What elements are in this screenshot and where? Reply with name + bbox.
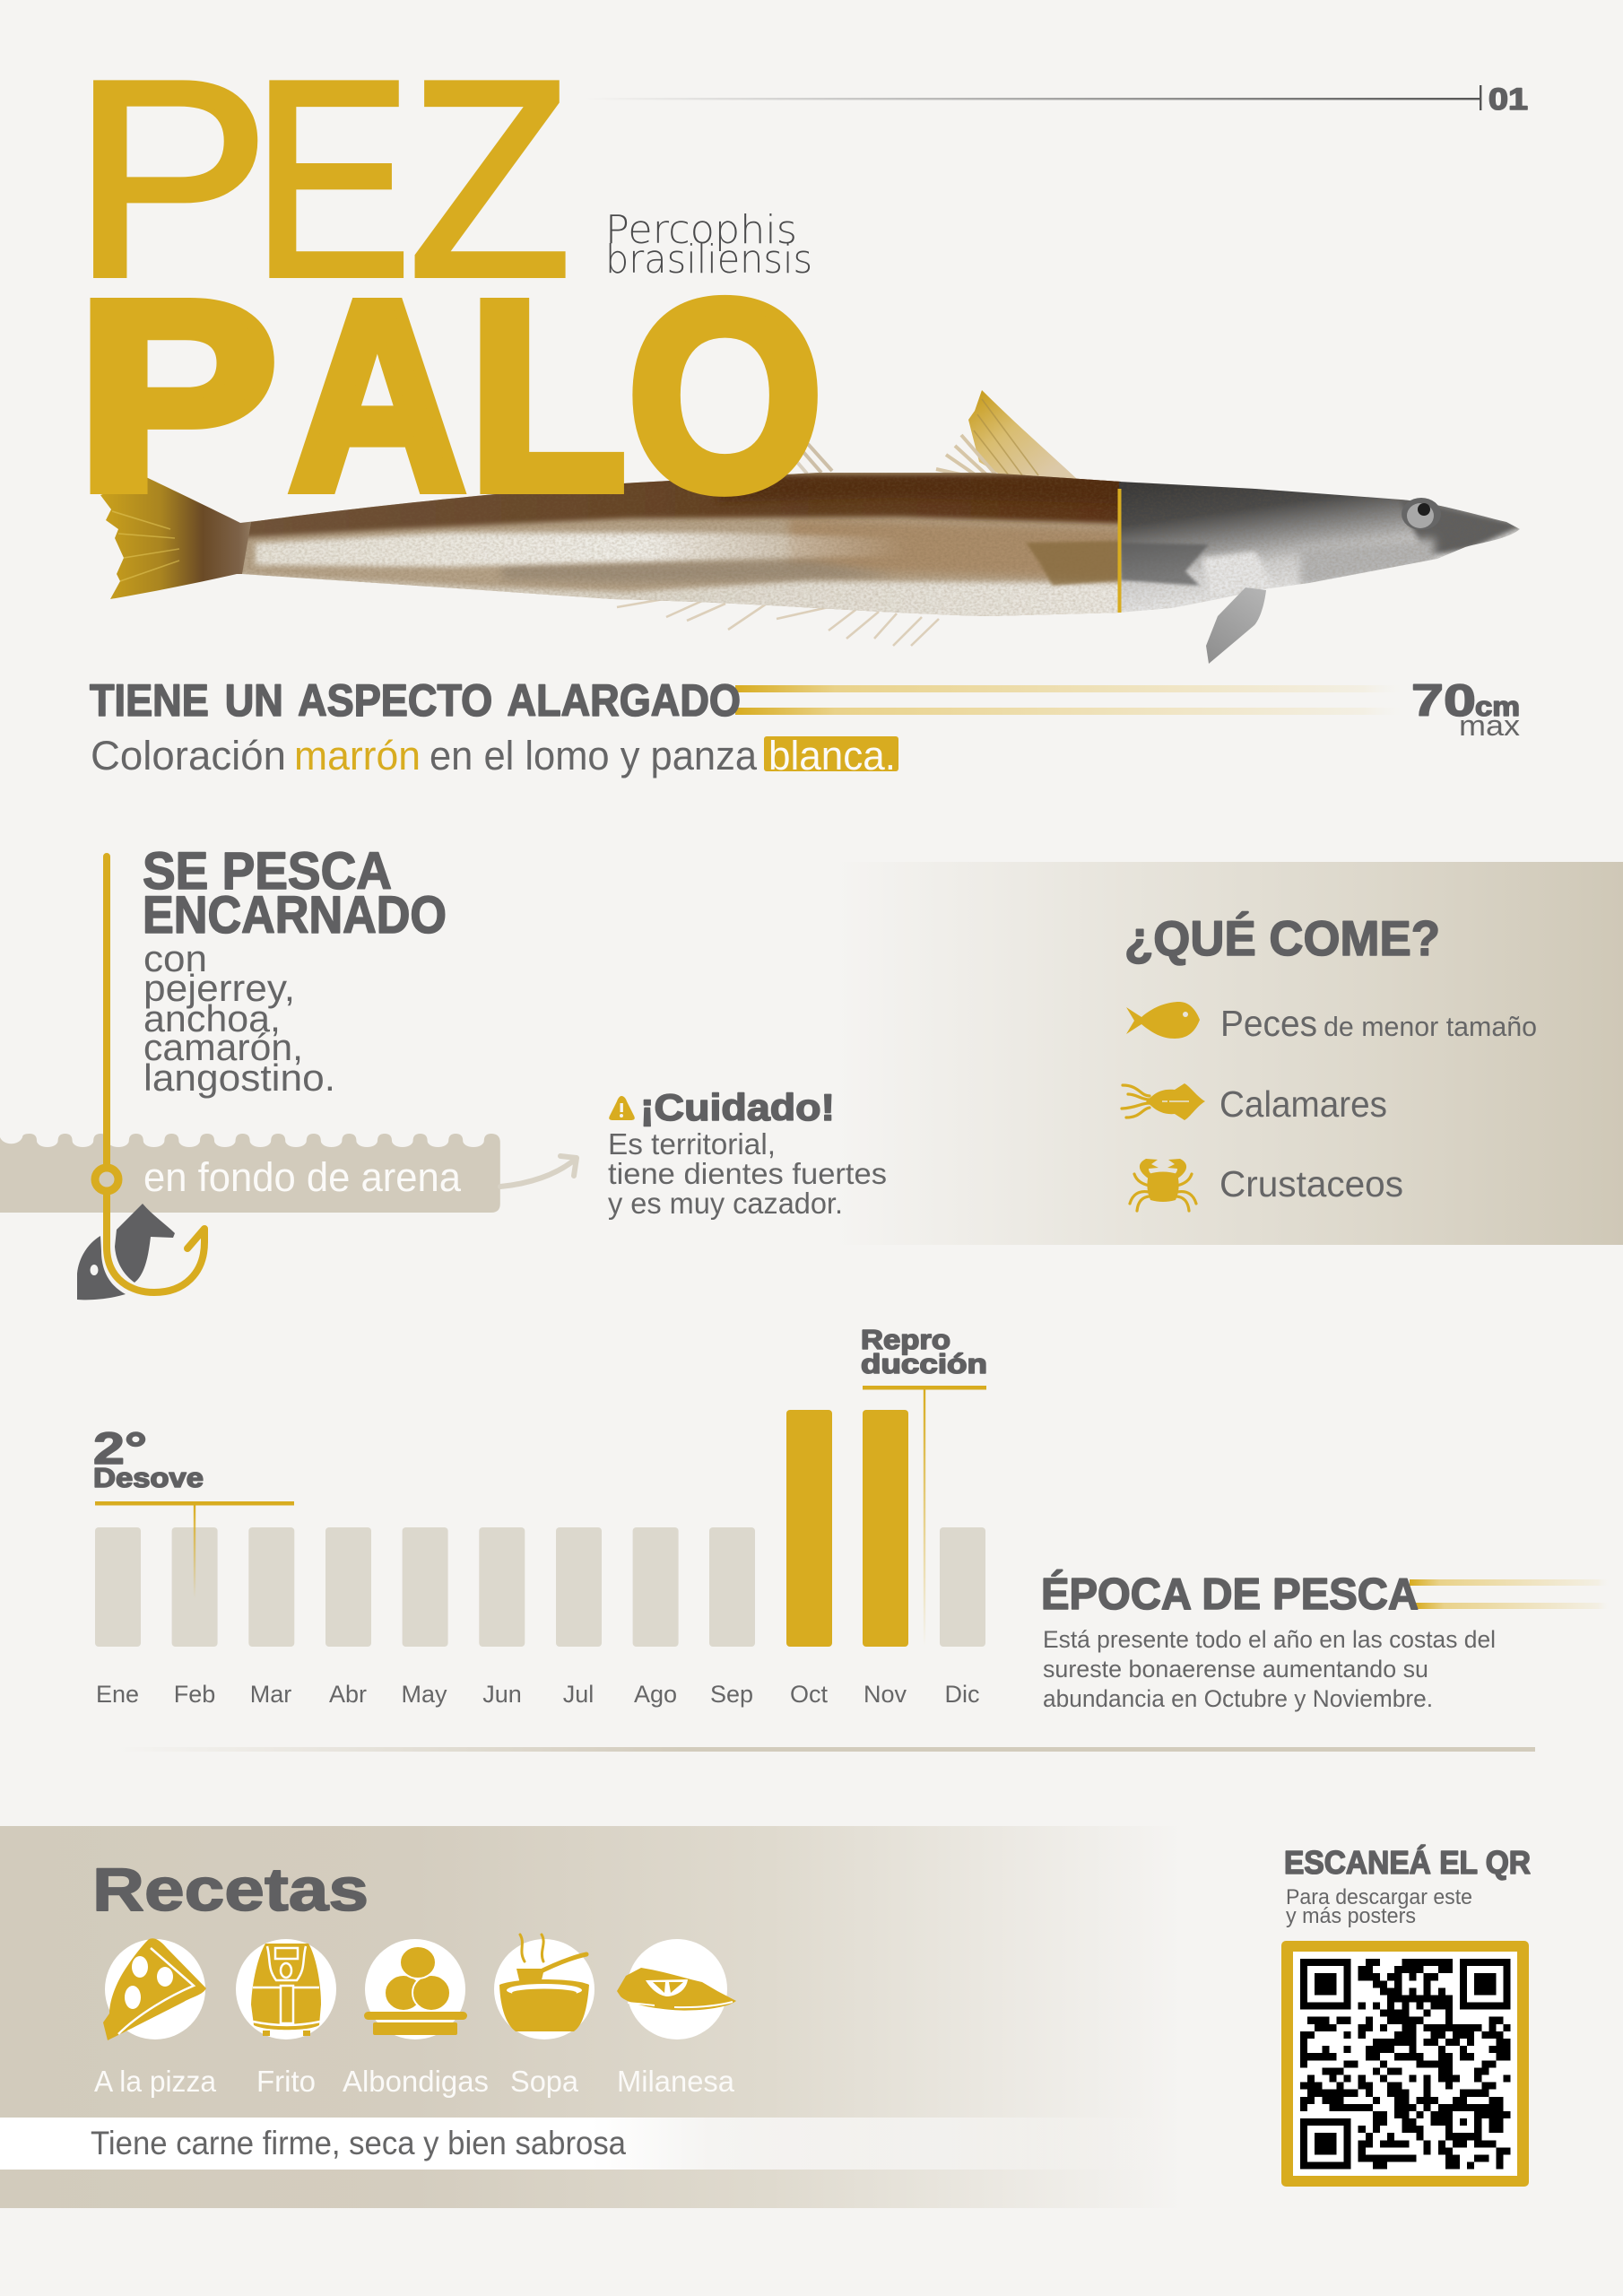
- coloration text: blanca.: [768, 733, 896, 778]
- ventral fin: [1206, 587, 1266, 664]
- fishing season text: abundancia en Octubre y Noviembre.: [1043, 1685, 1433, 1712]
- bait list: anchoa,: [143, 997, 281, 1039]
- month labels: Abr: [329, 1681, 367, 1708]
- coloration text: en el lomo y panza: [430, 733, 758, 778]
- warning callout: [608, 1086, 887, 1220]
- month labels: Jun: [482, 1681, 522, 1708]
- head in greyscale: [1119, 482, 1520, 613]
- month labels: Jul: [563, 1681, 594, 1708]
- recipe: pizza: [94, 1938, 217, 2098]
- sand label: en fondo de arena: [143, 1154, 462, 1200]
- panel: que come background: [834, 862, 1623, 1245]
- coloration text: marrón: [294, 733, 421, 778]
- pectoral fin brown half: [1026, 541, 1121, 586]
- title: PALO: O: [628, 247, 822, 545]
- title: PALO: P: [77, 247, 277, 545]
- scientific name: brasiliensis: [605, 237, 812, 283]
- item: crustaceos: Crustaceos: [1219, 1163, 1403, 1205]
- month labels: Ene: [96, 1681, 139, 1708]
- title: PALO: A: [290, 247, 465, 545]
- gold divider on fish: [1117, 489, 1121, 613]
- title: PEZ: P: [72, 23, 271, 335]
- bait list: con: [143, 937, 207, 979]
- title: PALO: L: [469, 247, 626, 545]
- fishing season text: [1041, 1570, 1610, 1712]
- month labels: Mar: [250, 1681, 291, 1708]
- size: 70 cm max: 70: [1411, 675, 1476, 726]
- annotation: reproduction: Repro: [861, 1324, 950, 1355]
- aspect heading with speed lines: TIENE UN ASPECTO ALARGADO: [90, 675, 741, 726]
- anal fin spines: [617, 599, 939, 646]
- QR code: [1281, 1941, 1529, 2187]
- annotation: 2nd spawning: Desove: [93, 1462, 204, 1493]
- coloration text: [91, 733, 898, 778]
- month labels: Nov: [864, 1681, 907, 1708]
- warning callout: tiene dientes fuertes: [608, 1157, 887, 1190]
- arrow to warning: [500, 1156, 577, 1187]
- icon: crab: [1130, 1159, 1196, 1211]
- recipe: meatballs: [343, 1939, 489, 2098]
- heading: recetas: Recetas: [92, 1856, 369, 1924]
- QR call to action: [1284, 1844, 1531, 1928]
- fishing season text: ÉPOCA DE PESCA: [1041, 1570, 1419, 1619]
- heading: que come: ¿QUÉ COME?: [1124, 910, 1440, 966]
- aspect heading with speed lines: [90, 675, 1403, 726]
- title: PEZ: E: [252, 23, 412, 335]
- annotation: 2nd spawning: [93, 1423, 294, 1598]
- heading: se pesca encarnado: ENCARNADO: [143, 886, 447, 944]
- bait list: camarón,: [143, 1026, 303, 1068]
- icon: fish: [1126, 1002, 1200, 1039]
- tagline strip: [0, 2118, 1184, 2170]
- month labels: Dic: [945, 1681, 979, 1708]
- warning callout: ¡Cuidado!: [640, 1086, 835, 1128]
- dorsal fin: [936, 390, 1077, 479]
- recipe: air fryer: Frito: [256, 2065, 316, 2098]
- month labels: Oct: [790, 1681, 828, 1708]
- icon: squid: [1122, 1083, 1205, 1120]
- highlighted bars: Oct, Nov: [786, 1410, 908, 1647]
- body: [242, 473, 1121, 616]
- bait list: [143, 937, 335, 1099]
- recipe: pizza: A la pizza: [94, 2065, 217, 2098]
- recipe: soup: Sopa: [510, 2065, 579, 2098]
- scientific name: Percophis: [605, 207, 797, 253]
- month labels: Ago: [634, 1681, 677, 1708]
- title: PEZ: Z: [409, 23, 571, 335]
- recipe: milanesa: [617, 1939, 736, 2098]
- small front dorsal fin: [789, 444, 832, 474]
- tagline strip: Tiene carne firme, seca y bien sabrosa: [91, 2125, 626, 2161]
- month bars: [95, 1527, 985, 1647]
- QR call to action: ESCANEÁ EL QR: [1284, 1844, 1531, 1881]
- recipe: air fryer: [236, 1939, 336, 2098]
- fishing season text: Está presente todo el año en las costas del: [1043, 1626, 1496, 1653]
- month labels: May: [401, 1681, 447, 1708]
- bait list: langostino.: [143, 1057, 335, 1099]
- recipe: meatballs: Albondigas: [343, 2065, 489, 2098]
- pectoral fin grey half: [1121, 543, 1209, 586]
- icon: fishing hook: [95, 857, 204, 1292]
- item: peces: [1220, 1003, 1537, 1044]
- item: peces: Peces: [1220, 1003, 1317, 1044]
- scientific name: [605, 207, 812, 283]
- QR call to action: y más posters: [1286, 1904, 1416, 1928]
- heading: se pesca encarnado: [143, 842, 447, 944]
- recipe: soup: [494, 1935, 595, 2098]
- warning callout: y es muy cazador.: [608, 1187, 843, 1220]
- item: peces: de menor tamaño: [1324, 1011, 1537, 1042]
- size: 70 cm max: max: [1459, 709, 1520, 742]
- header rule and page number: 01: [1488, 83, 1528, 117]
- bar chart: fishing season by month: [93, 1324, 987, 1708]
- warning callout: Es territorial,: [608, 1127, 776, 1161]
- icon: warning triangle: [609, 1096, 635, 1120]
- panel: recipes: [0, 1826, 1184, 2208]
- que come content: [1122, 910, 1537, 1211]
- eye: [1402, 498, 1441, 530]
- annotation: reproduction: ducción: [861, 1348, 987, 1379]
- size: 70 cm max: cm: [1475, 691, 1520, 722]
- icon: bait fish: [77, 1204, 175, 1300]
- section divider: [117, 1747, 1535, 1752]
- fish illustration: [100, 390, 1532, 664]
- annotation: reproduction: [861, 1324, 987, 1647]
- recipe: milanesa: Milanesa: [617, 2065, 735, 2098]
- bait list: pejerrey,: [143, 967, 295, 1009]
- annotation: 2nd spawning: 2°: [93, 1423, 147, 1474]
- size: 70 cm max: [1411, 675, 1520, 742]
- tail: [100, 477, 264, 599]
- month labels: [96, 1681, 979, 1708]
- month labels: Feb: [174, 1681, 215, 1708]
- coloration text: Coloración: [91, 733, 286, 778]
- month labels: Sep: [710, 1681, 753, 1708]
- item: calamares: Calamares: [1219, 1083, 1387, 1125]
- QR call to action: Para descargar este: [1286, 1885, 1472, 1909]
- sand band with waves: [0, 1134, 500, 1213]
- fishing season text: sureste bonaerense aumentando su: [1043, 1656, 1428, 1683]
- heading: se pesca encarnado: SE PESCA: [143, 842, 392, 900]
